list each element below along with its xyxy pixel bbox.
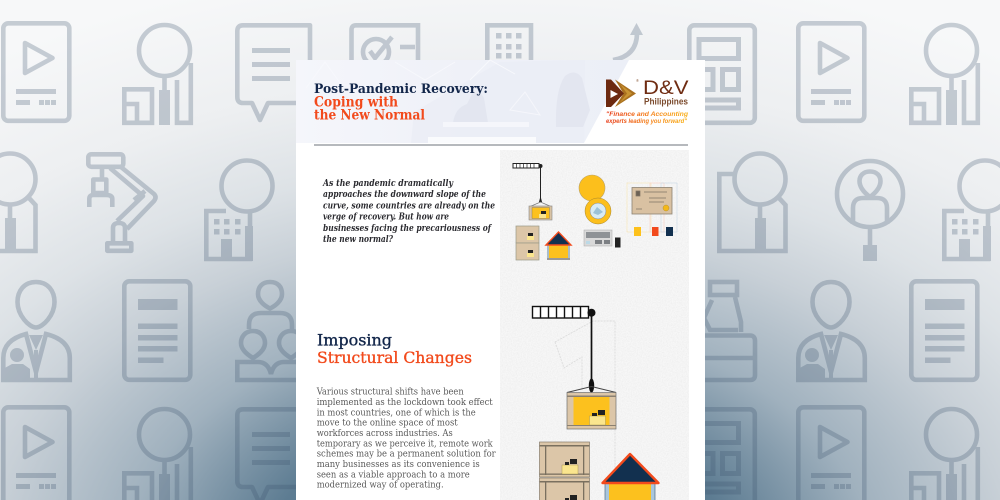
- small orange badge: [652, 227, 658, 236]
- page sheet: [296, 60, 705, 500]
- body text: [316, 387, 496, 490]
- icon: magnifier over chart, row 1: [124, 25, 191, 125]
- icon: magnifier over document, row 2 right: [719, 154, 786, 251]
- icon: person with child, row 3 right: [798, 282, 865, 380]
- icon: magnifier over document, row 2 left: [0, 154, 36, 251]
- icon: group of people with books, row 3: [237, 282, 303, 380]
- faint dashed guides: [555, 321, 650, 490]
- body text: seen as a viable approach to a more: [317, 469, 470, 480]
- logo tagline: [606, 111, 688, 125]
- divider: [314, 144, 688, 146]
- title: [314, 82, 488, 124]
- hanging crate: [567, 386, 616, 429]
- laptop: [584, 230, 612, 246]
- stacked crate upper: [540, 442, 590, 477]
- icon: magnifier over building, row 2 right: [944, 160, 1000, 261]
- small yellow badge: [634, 227, 641, 236]
- crane rope and hook: [589, 316, 594, 392]
- document page: [296, 60, 705, 500]
- body text: in most countries, one of which is the: [317, 407, 476, 418]
- icon: magnifier over building, row 2: [206, 160, 272, 261]
- icon: layout document, row 4: [689, 409, 755, 500]
- intro text: approaches the downward slope of the: [323, 190, 486, 200]
- icon: robotic arm, row 2: [88, 154, 156, 251]
- icon: video document, row 4 left: [3, 407, 69, 500]
- title: Coping with: [314, 94, 398, 110]
- body text: temporary as we perceive it, remote work: [317, 438, 493, 449]
- intro text: businesses facing the precariousness of: [323, 224, 493, 234]
- stacked crate lower: [540, 478, 590, 500]
- icon: video document, row 1 left: [3, 23, 69, 121]
- icon: video document, row 4 right: [798, 407, 864, 500]
- logo tagline: experts leading you forward": [606, 118, 687, 125]
- icon: magnifier over chart, row 1 right: [911, 25, 978, 125]
- icon: magnifier with person, row 2: [837, 161, 903, 261]
- icon: hand on stack, row 3: [704, 282, 755, 380]
- section heading: Structural Changes: [317, 348, 472, 367]
- logo: D&V Philippines: [606, 77, 688, 125]
- icon: office building, row 1: [487, 25, 531, 60]
- body text: modernized way of operating.: [317, 480, 444, 490]
- icon: magnifier over chart, row 4: [124, 409, 191, 500]
- intro text: As the pandemic dramatically: [322, 179, 454, 189]
- gold circle: [579, 175, 605, 201]
- title: Post-Pandemic Recovery:: [314, 82, 488, 97]
- small crane: [513, 164, 542, 202]
- gold ring with globe: [585, 198, 611, 224]
- house: [602, 454, 658, 500]
- icon: magnifier over chart, row 4 right: [911, 409, 978, 500]
- body text: workforces across industries. As: [317, 428, 453, 439]
- intro text: [322, 179, 495, 245]
- section heading: [317, 331, 472, 367]
- small hanging crate: [529, 202, 552, 220]
- icon: logo arrows: [606, 80, 636, 107]
- icon: checklist card, row 1: [352, 25, 418, 65]
- certificate: [632, 188, 672, 214]
- body text: Various structural shifts have been: [316, 387, 464, 398]
- section heading: Imposing: [317, 331, 392, 350]
- icon: growth arrow, row 1: [613, 23, 643, 60]
- body text: many businesses as its convenience is: [317, 459, 480, 470]
- icon: text document, row 3: [124, 281, 190, 380]
- intro text: curve, some countries are already on the: [323, 201, 495, 211]
- icon: speech bubble, row 4: [237, 409, 310, 500]
- logo registered mark: ®: [636, 78, 639, 83]
- logo subtitle: Philippines: [644, 96, 688, 108]
- body text: schemes may be a permanent solution for: [317, 449, 496, 460]
- panel: illustration background: [500, 150, 689, 500]
- illustration: large crane and crates: [532, 306, 658, 500]
- crane arm: [532, 306, 596, 318]
- icon: speech bubble, row 1: [237, 25, 310, 120]
- panel: header band: [296, 60, 629, 143]
- small house: [546, 232, 571, 260]
- small stacked crates: [516, 226, 539, 260]
- icon: layout document, row 1: [689, 25, 755, 123]
- intro text: the new normal?: [323, 235, 394, 245]
- faint colored frames: [627, 183, 677, 232]
- title: the New Normal: [314, 108, 425, 124]
- logo tagline: "Finance and Accounting: [606, 111, 688, 118]
- icon: video document, row 1 right: [798, 23, 864, 121]
- intro text: verge of recovery. But how are: [323, 213, 449, 223]
- illustration: small overview: [513, 164, 677, 260]
- icon: text document, row 3 right: [911, 281, 977, 380]
- body text: implemented as the lockdown took effect: [317, 397, 493, 408]
- icon: person with child, row 3 left: [3, 282, 70, 380]
- phone: [615, 238, 620, 248]
- body text: move to the online space of most: [317, 418, 458, 429]
- small navy badge: [666, 227, 673, 236]
- logo wordmark: D&V: [643, 77, 688, 99]
